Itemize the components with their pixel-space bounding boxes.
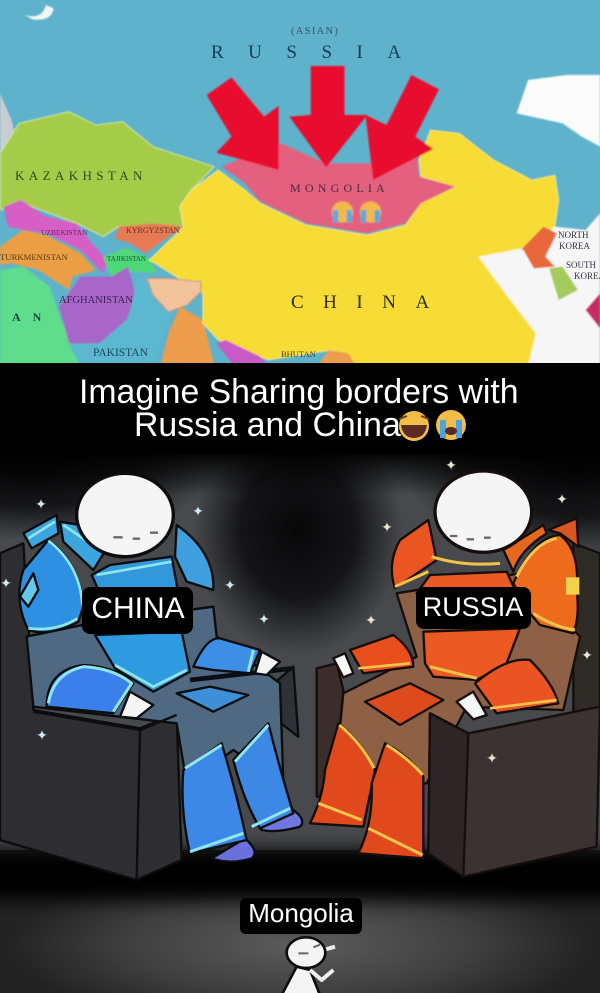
map labels — [0, 26, 600, 359]
chair back — [573, 543, 600, 717]
chair front — [428, 707, 600, 877]
foot rear — [260, 810, 302, 831]
label: RUSSIA — [416, 587, 531, 629]
shin rear — [233, 723, 293, 828]
shin front — [182, 743, 247, 853]
dark room background — [0, 455, 600, 855]
gold square — [566, 577, 579, 595]
map labels: PAKISTAN — [93, 347, 149, 359]
India — [161, 307, 214, 365]
Bhutan neighbours — [318, 350, 356, 365]
spiral — [20, 573, 38, 607]
Far-east white land — [517, 75, 600, 147]
shoulder rear plate — [548, 518, 578, 547]
sparkles: ✦ — [381, 520, 393, 536]
forearm far — [193, 638, 260, 673]
Tajikistan — [103, 248, 157, 277]
vignette shadows — [0, 385, 600, 655]
map labels: TURKMENISTAN — [0, 252, 69, 262]
thigh plate — [177, 687, 248, 712]
map labels: AFGHANISTAN — [59, 295, 133, 306]
Nepal — [216, 340, 268, 365]
legs and body — [282, 967, 320, 993]
map labels: (ASIAN) — [291, 26, 339, 37]
sparkles: ✦ — [365, 613, 377, 629]
Turkmenistan — [0, 230, 96, 290]
Afghanistan — [59, 267, 136, 343]
South Korea — [549, 267, 578, 300]
sparkles: ✦ — [35, 497, 47, 513]
map labels: KOREA — [559, 241, 590, 251]
forearm near — [47, 665, 133, 713]
yellow trim — [395, 538, 575, 678]
right armrest — [267, 667, 298, 737]
Kyrgyzstan — [115, 223, 184, 253]
map labels: MONGOLIA — [290, 181, 389, 195]
chair side shade — [428, 713, 468, 877]
right pauldron — [513, 535, 578, 633]
forearm near — [475, 660, 558, 713]
label: CHINA: CHINA — [91, 592, 185, 625]
Japan sliver — [586, 293, 600, 328]
hand near — [120, 692, 153, 718]
map labels: BHUTAN — [281, 349, 316, 359]
map labels: CHINA — [291, 292, 449, 313]
Uzbekistan — [4, 200, 107, 273]
lower torso armour — [95, 632, 190, 692]
panel: map of Mongolia between Russia and China — [0, 0, 600, 365]
arm and hand — [310, 947, 335, 980]
Iran region — [0, 267, 80, 365]
face — [113, 533, 158, 539]
title emojis — [399, 410, 466, 441]
sparkles: ✦ — [224, 578, 236, 594]
far arm top — [190, 668, 293, 680]
upper torso armour — [417, 572, 517, 593]
shoulder plate back — [23, 515, 58, 548]
floor — [0, 850, 600, 993]
arm trims — [358, 663, 557, 708]
forearm far — [350, 635, 413, 673]
label: RUSSIA: RUSSIA — [423, 592, 523, 622]
upper chest armour — [92, 557, 178, 593]
figure: Russia — [310, 471, 600, 877]
face — [450, 536, 491, 539]
map labels: AN — [12, 310, 53, 324]
Russia ocean-blue background — [0, 0, 600, 365]
body cloth — [27, 607, 283, 783]
right pauldron — [175, 525, 213, 590]
title band — [0, 363, 600, 455]
left armrest — [317, 663, 343, 797]
hand far — [255, 652, 280, 675]
panel: cartoon of two armoured figures — [0, 385, 600, 993]
map labels: SOUTH — [566, 260, 597, 270]
East coast white land — [478, 213, 600, 365]
sparkles: ✦ — [0, 576, 12, 592]
map labels: TAJIKISTAN — [107, 255, 146, 263]
chair top edge — [33, 712, 177, 880]
Kazakhstan — [0, 112, 214, 237]
sparkles: ✦ — [192, 504, 204, 520]
thigh plate — [365, 683, 443, 725]
left pauldron — [19, 540, 83, 632]
North Korea — [522, 227, 557, 268]
China — [149, 130, 559, 365]
sparkles: ✦ — [36, 728, 48, 744]
head — [435, 471, 532, 552]
figure: China — [0, 473, 302, 880]
map labels: NORTH — [558, 230, 589, 240]
title text: Russia and China — [134, 406, 401, 444]
collar — [503, 525, 547, 572]
foot front — [212, 838, 255, 862]
handshake emoji — [147, 278, 201, 312]
sparkles: ✦ — [445, 458, 457, 474]
shin rear — [310, 723, 375, 827]
title text: Imagine Sharing borders with — [79, 373, 519, 411]
trim — [28, 522, 187, 687]
crying emojis — [332, 201, 381, 223]
label: Mongolia: Mongolia — [248, 898, 354, 928]
sparkles: ✦ — [486, 751, 498, 767]
sparkles: ✦ — [581, 648, 593, 664]
arrows — [207, 66, 439, 180]
left pauldron — [392, 520, 437, 588]
Pakistan — [69, 277, 172, 365]
face — [298, 945, 320, 953]
collar plate — [60, 522, 107, 570]
map labels: RUSSIA — [211, 42, 426, 63]
Far-left grey land — [0, 93, 19, 153]
lower torso armour — [423, 628, 520, 680]
chair back — [0, 543, 182, 880]
brown cloth body — [340, 573, 580, 783]
Mongolia — [222, 143, 455, 233]
map labels: UZBEKISTAN — [41, 228, 88, 237]
floor shadow — [0, 850, 600, 900]
shin front — [358, 743, 423, 858]
small figure: Mongolia — [282, 937, 335, 993]
map labels: KAZAKHSTAN — [15, 168, 147, 183]
label: CHINA — [82, 587, 193, 634]
Arctic island — [25, 5, 54, 20]
sparkles: ✦ — [258, 612, 270, 628]
head — [287, 937, 325, 968]
sparkles — [0, 458, 593, 767]
sparkles: ✦ — [556, 492, 568, 508]
hands — [333, 653, 487, 719]
map labels: KYRGYZSTAN — [126, 226, 180, 235]
head — [77, 473, 173, 557]
